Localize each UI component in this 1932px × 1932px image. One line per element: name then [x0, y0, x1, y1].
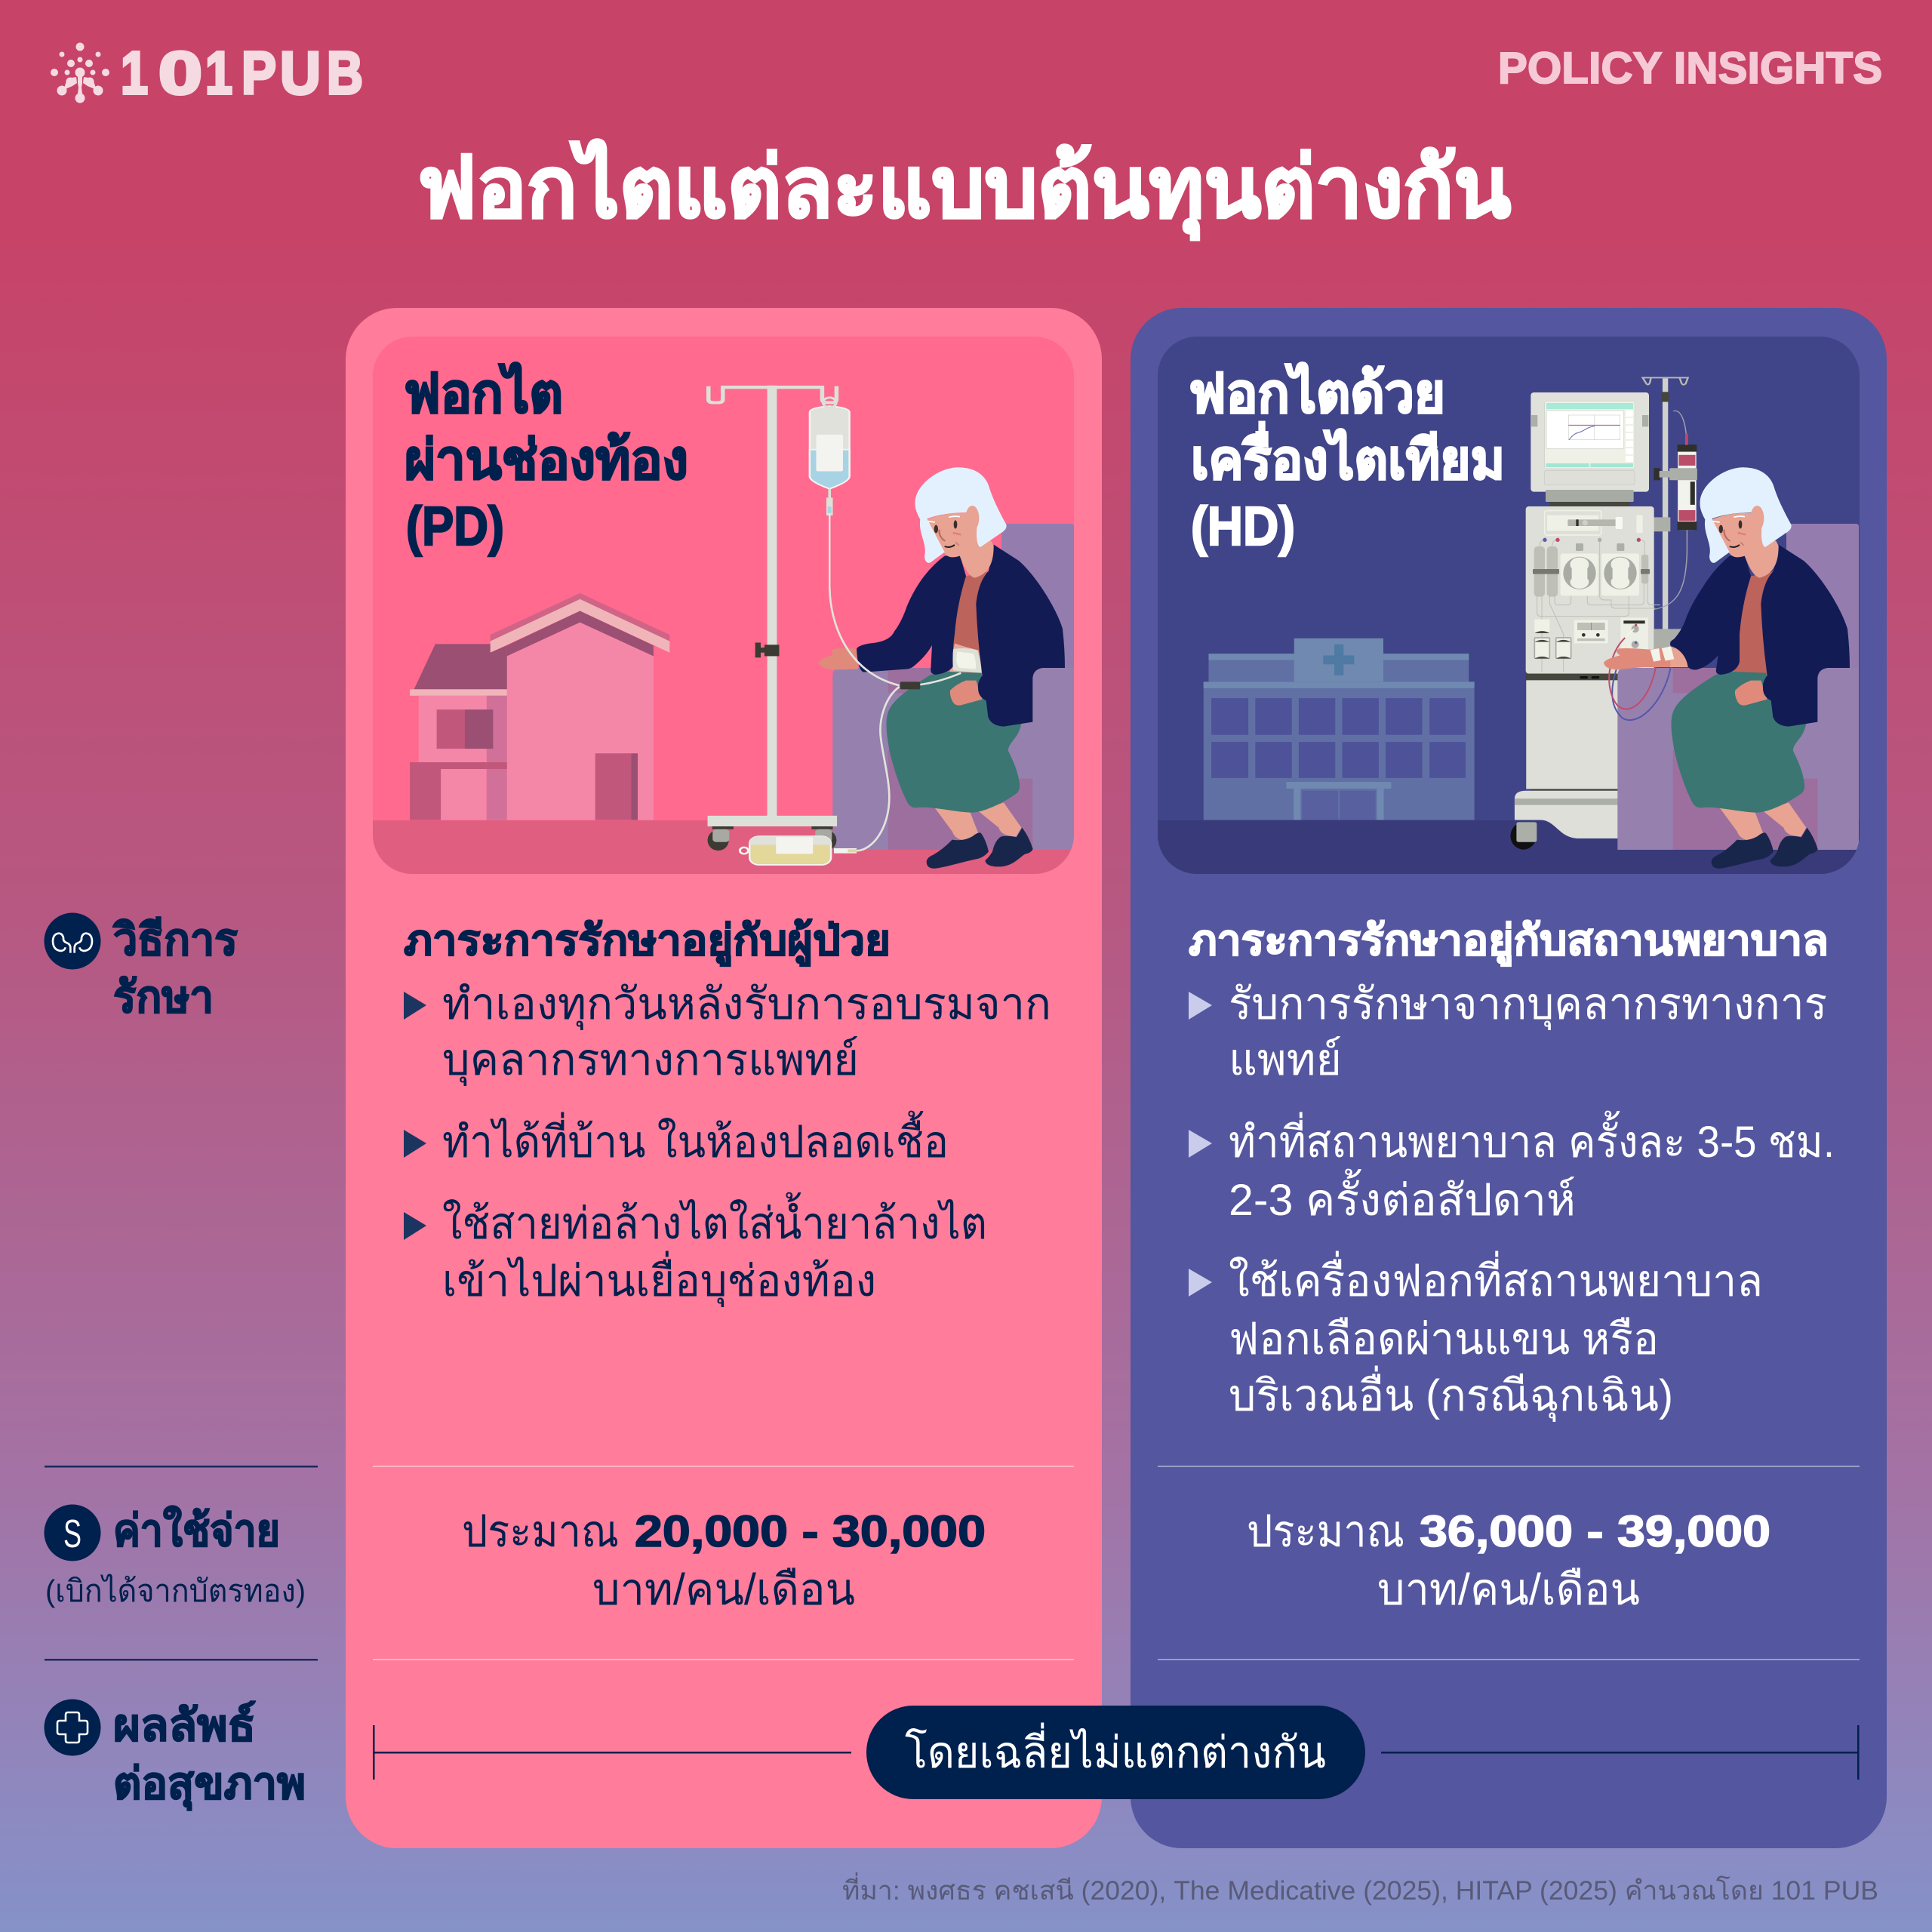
icon: IV stand and bags [708, 386, 850, 851]
PD burden heading: ภาระการรักษาอยู่กับผู้ป่วย [404, 916, 891, 967]
HD bullet list: 2-3 ครั้งต่อสัปดาห์ [1229, 1169, 1576, 1225]
HD bullet list: รับการรักษาจากบุคลากรทางการ [1229, 980, 1827, 1031]
icon: drain bag [740, 836, 831, 865]
PD bullet list [404, 980, 1051, 1308]
HD cost: 36,000 - 39,000 [1420, 1507, 1770, 1556]
HD bullet list: ใช้เครื่องฟอกที่สถานพยาบาล [1229, 1251, 1763, 1306]
HD bullet list: แพทย์ [1229, 1035, 1342, 1084]
callout: no difference: โดยเฉลี่ยไม่แตกต่างกัน [905, 1722, 1326, 1777]
label text: ค่าใช้จ่าย [113, 1505, 280, 1555]
HD burden heading: ภาระการรักษาอยู่กับสถานพยาบาล [1189, 916, 1829, 967]
icon: patient head [915, 467, 1007, 578]
logo wordmark [121, 39, 363, 106]
HD bullet list: ทำที่สถานพยาบาล ครั้งละ 3-5 ชม. [1229, 1111, 1835, 1167]
illustration panel: HD [1158, 337, 1860, 874]
PD cost: ประมาณ [462, 1507, 619, 1556]
dialysis tubes [1609, 629, 1672, 720]
title: ฟอกไตแต่ละแบบต้นทุนต่างกัน [417, 140, 1511, 241]
bandage at catheter site [949, 644, 983, 673]
PD bullet list: ทำได้ที่บ้าน ในห้องปลอดเชื้อ [442, 1111, 949, 1167]
HD cost [1247, 1507, 1770, 1614]
row label: cost [44, 1505, 306, 1608]
HD cost: บาท/คน/เดือน [1377, 1565, 1640, 1614]
label text: ต่อสุขภาพ [113, 1759, 306, 1811]
illustration: hospital and machine lower [1204, 377, 1697, 850]
icon: logo network [51, 42, 109, 103]
icon: house [410, 593, 669, 820]
outcome bracket [373, 1706, 1860, 1799]
icon: patient PD [818, 545, 1065, 869]
HD cost: ประมาณ [1247, 1507, 1404, 1556]
label text [113, 1700, 306, 1811]
pole support [1654, 629, 1684, 649]
HD bullet list: บริเวณอื่น (กรณีฉุกเฉิน) [1229, 1365, 1673, 1423]
HD heading: ฟอกไตด้วย [1189, 361, 1445, 424]
header label: policy insights: POLICY INSIGHTS [1498, 44, 1882, 93]
panel: HD card [1131, 308, 1887, 1848]
logo wordmark: 0 [158, 39, 202, 106]
icon: currency [44, 1505, 101, 1561]
icon: dialysis machine upper [1526, 392, 1660, 680]
HD heading [1189, 361, 1505, 557]
icon: machine lower body and pole [1510, 377, 1697, 850]
patient left hand [818, 648, 858, 669]
PD cost: 20,000 - 30,000 [635, 1507, 986, 1556]
icon: patient HD [1604, 524, 1859, 869]
PD heading: ฟอกไต [404, 361, 563, 424]
PD heading: (PD) [406, 497, 504, 557]
catheter tubing [829, 588, 961, 851]
icon: chair [832, 524, 1074, 850]
HD bullet list [1189, 980, 1835, 1423]
PD heading [404, 361, 688, 557]
patient jacket sleeve [1670, 555, 1751, 675]
logo wordmark: 1 [205, 39, 232, 106]
icon: currency: S [63, 1512, 82, 1556]
row label: health outcome [44, 1700, 306, 1811]
label text: วิธีการ [112, 915, 238, 964]
PD cost: บาท/คน/เดือน [592, 1565, 855, 1614]
HD bullet list: ฟอกเลือดผ่านแขน หรือ [1229, 1315, 1659, 1364]
PD bullet list: ใช้สายท่อล้างไตใส่น้ำยาล้างไต [442, 1192, 987, 1248]
logo wordmark: 1 [121, 39, 148, 106]
row label: treatment method [44, 913, 238, 1022]
source note: ที่มา: พงศธร คชเสนี (2020), The Medicative (2025), HITAP (2025) คำนวณโดย 101 PUB [842, 1872, 1878, 1906]
icon: hospital [1204, 638, 1475, 820]
panel: PD card [346, 308, 1102, 1848]
HD heading: เครื่องไตเทียม [1191, 421, 1505, 491]
logo wordmark: B [327, 39, 363, 106]
PD heading: ผ่านช่องท้อง [405, 430, 688, 491]
callout: no difference [866, 1706, 1365, 1799]
icon: patient head [1700, 467, 1792, 578]
logo wordmark: U [280, 39, 321, 106]
logo: 101 PUB [51, 39, 363, 106]
PD bullet list: ทำเองทุกวันหลังรับการอบรมจาก [442, 980, 1051, 1031]
icon: medical cross [44, 1700, 101, 1755]
PD bullet list: เข้าไปผ่านเยื่อบุช่องท้อง [442, 1251, 876, 1308]
patient arm with bandages [1604, 646, 1688, 669]
PD bullet list: บุคลากรทางการแพทย์ [442, 1035, 859, 1087]
label text [45, 1505, 306, 1608]
HD heading: (HD) [1191, 497, 1295, 557]
illustration panel: PD [373, 337, 1074, 874]
label text: รักษา [113, 973, 214, 1022]
PD cost [462, 1507, 986, 1614]
label text [112, 915, 238, 1022]
icon: kidneys [44, 913, 101, 969]
label text: (เบิกได้จากบัตรทอง) [45, 1574, 306, 1608]
patient jacket sleeve [857, 555, 966, 675]
logo wordmark: P [242, 39, 276, 106]
label text: ผลลัพธ์ [113, 1700, 256, 1750]
